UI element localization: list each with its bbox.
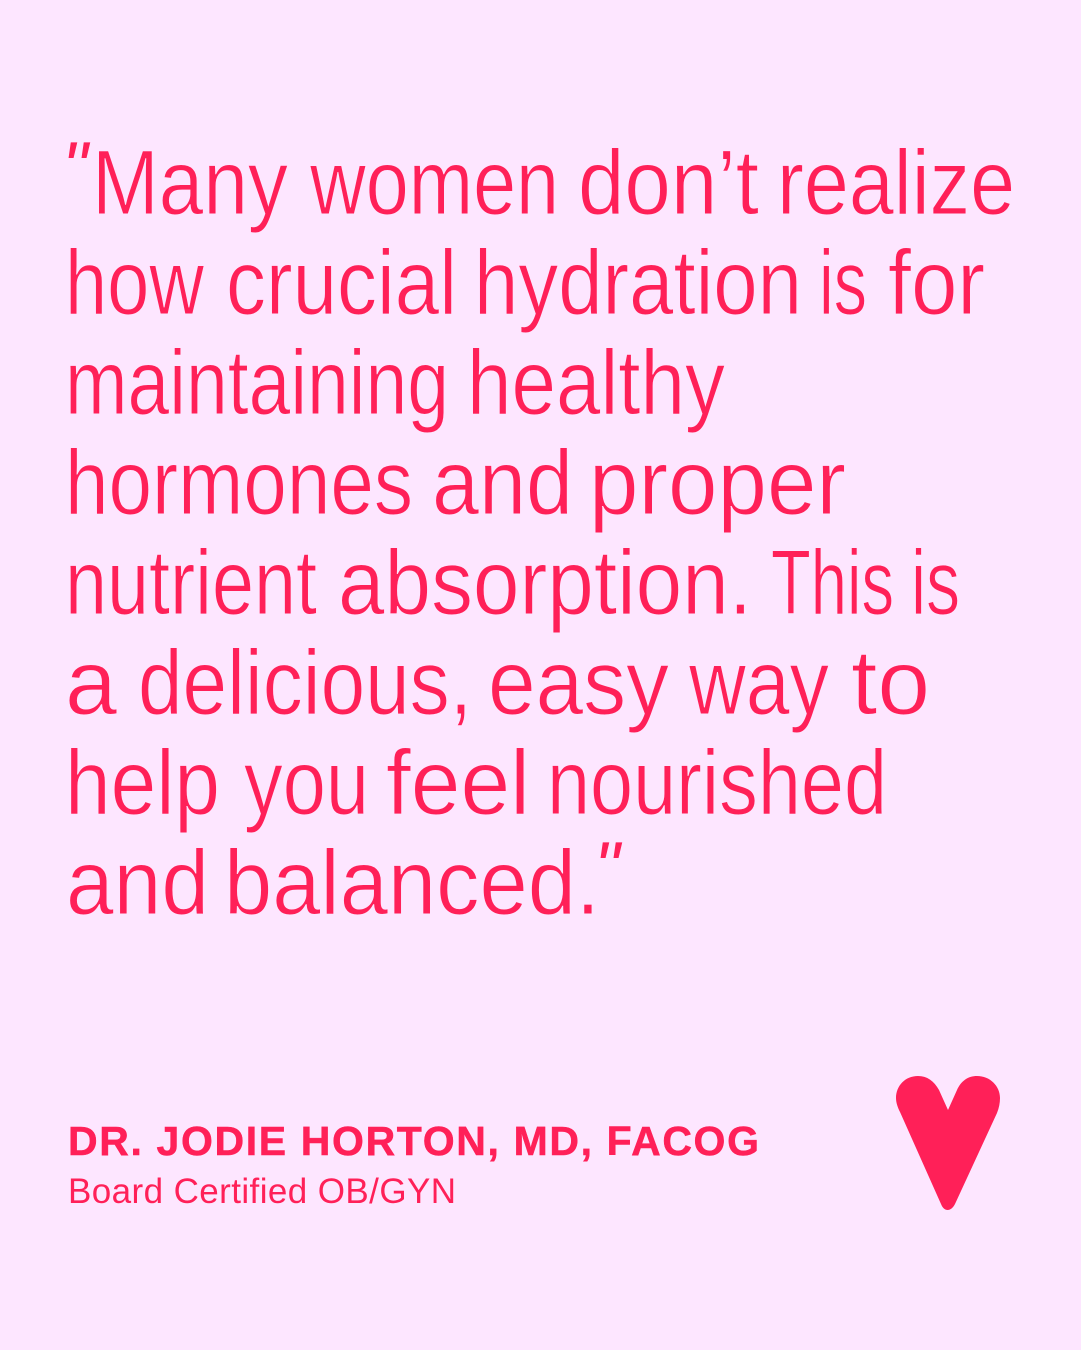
quote text: maintaining bbox=[65, 332, 449, 434]
quote text: proper bbox=[589, 432, 846, 534]
doctor name: DR. JODIE HORTON, MD, FACOG bbox=[68, 1118, 759, 1164]
quote text: and bbox=[432, 432, 573, 534]
quote text: you bbox=[244, 732, 369, 834]
quote text: hormones bbox=[65, 432, 413, 534]
quote text: for bbox=[888, 232, 985, 334]
icon: heart bbox=[896, 1076, 1000, 1210]
quote text: is bbox=[911, 532, 960, 634]
quote text: easy bbox=[488, 632, 669, 734]
quote text: hydration bbox=[474, 232, 802, 334]
quote text: absorption. bbox=[338, 532, 752, 634]
quote text: to bbox=[851, 632, 930, 734]
quote text: delicious, bbox=[138, 632, 472, 734]
quote text: help bbox=[65, 732, 220, 834]
credential: Board Certified OB/GYN bbox=[68, 1172, 456, 1211]
quote text bbox=[62, 128, 1015, 934]
quote text: nutrient bbox=[65, 532, 317, 634]
attribution bbox=[68, 1118, 759, 1211]
quote text: " bbox=[594, 828, 623, 908]
quote text: realize bbox=[777, 132, 1015, 234]
quote text: This bbox=[771, 532, 894, 634]
quote text: and bbox=[66, 832, 209, 934]
quote text: healthy bbox=[467, 332, 725, 434]
quote text: Many bbox=[92, 132, 288, 234]
quote text: " bbox=[62, 128, 91, 208]
quote text: feel bbox=[386, 732, 530, 834]
quote text: way bbox=[688, 632, 829, 734]
quote text: crucial bbox=[226, 232, 457, 334]
quote text: how bbox=[65, 232, 204, 334]
quote text: is bbox=[819, 232, 867, 334]
quote text: balanced. bbox=[224, 832, 600, 934]
quote text: women bbox=[309, 132, 559, 234]
quote text: nourished bbox=[547, 732, 887, 834]
quote text: a bbox=[65, 632, 118, 734]
quote text: don’t bbox=[578, 132, 759, 234]
